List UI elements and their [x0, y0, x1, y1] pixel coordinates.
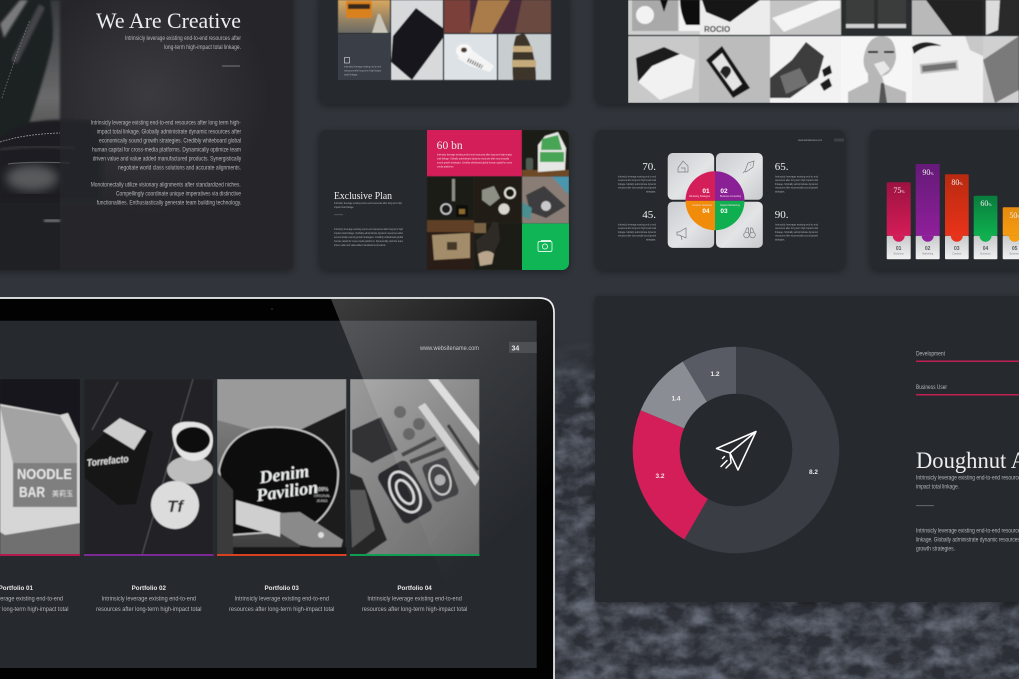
marble texture [555, 340, 1019, 679]
page number [509, 342, 537, 353]
tile: dark caption: total linkage. [344, 72, 358, 76]
photo: coffee and coasters [84, 379, 214, 555]
bar: 75: 01 [896, 246, 902, 252]
doughnut chart: 3.2 [655, 473, 665, 480]
photo: school bus [338, 0, 390, 33]
heading: We Are Creative: We Are Creative [96, 8, 241, 33]
body text: human capital for cross-media platforms. Dynamically optimize team [92, 148, 241, 154]
photo: denim pavilion [217, 379, 346, 555]
bar: 75: Business [894, 252, 905, 256]
panel: doughnut chart slide [595, 296, 1019, 602]
photo: striped coat [498, 33, 551, 80]
stat: 90: 90. [775, 209, 789, 221]
photo: stationery [350, 379, 480, 555]
stat: 45: resources after economically sound growth [618, 234, 656, 238]
bar: 80: 03 [954, 246, 960, 252]
photo: kraft box [427, 220, 474, 270]
tile: dark caption: resources after long term high-impact [344, 68, 381, 72]
photo: denim pavilion: ORIGINAL [314, 494, 330, 498]
tile: green camera icon [522, 224, 569, 270]
bar: 60 [974, 196, 997, 259]
body text: human capital for cross-media platforms. Dynamically optimize team [334, 239, 403, 243]
callout: 60 bn: Intrinsicly leverage existing end-to-end resources after long term high-impact [437, 152, 512, 156]
body text [334, 227, 403, 247]
stat: 65: resources after economically sound growth [775, 186, 818, 190]
body text: economically sound growth strategies. Credibly whiteboard global [334, 235, 403, 239]
icon: binoculars [744, 228, 755, 238]
panel: we are creative [0, 0, 293, 270]
reflection [331, 299, 553, 516]
body text: economically sound growth strategies. Credibly whiteboard global [99, 138, 241, 144]
caption: portfolio 03 [229, 585, 335, 613]
bar: 90 [916, 164, 940, 259]
stat: 65 [775, 161, 818, 193]
stat: 90: Intrinsicly leverage existing end to end [775, 222, 818, 226]
intro text: long-term high-impact total linkage. [164, 45, 241, 51]
bar: 80: 80% [951, 178, 963, 187]
legend: business user: Business User [916, 385, 947, 391]
body text: growth strategies. [916, 546, 955, 552]
stat: 70: 70. [642, 161, 656, 173]
icon: paper plane [716, 432, 756, 470]
bar: 80 [945, 174, 969, 259]
caption: portfolio 01 [0, 585, 69, 613]
stat: 70: Intrinsicly leverage existing end to end [618, 174, 656, 178]
icon: rocket [743, 161, 754, 173]
stat: 45 [618, 209, 656, 241]
stat: 90: strategies. [775, 237, 785, 241]
photo: denim pavilion: JEANS [316, 499, 328, 503]
photo: black notepads [391, 0, 443, 80]
body text [91, 120, 242, 206]
body text: driven value and value added manufactured products. [334, 243, 386, 247]
caption: portfolio 03: resources after long-term high-impact total [229, 606, 335, 613]
panel: laptop mockup [0, 298, 554, 679]
bar: 60: Business [980, 252, 991, 256]
body text: Intrinsicly leverage existing end-to-end resources after long term high- [91, 120, 241, 126]
body text: impact total linkage. Globally administrate dynamic resources after [97, 130, 241, 136]
quadrant circle: Creative Solutions [692, 203, 712, 207]
legend: development [916, 352, 1019, 362]
photo: denim pavilion: 100% [316, 487, 329, 493]
body text: driven value and value added manufactured products. Synergistically [93, 156, 241, 162]
body text: impact total linkage. Globally administrate dynamic resources after [334, 231, 403, 235]
quadrant circle: Digital Marketing [720, 203, 740, 207]
photo: noodle bar bag: NOODLE [17, 467, 72, 483]
body text: Monotonectally utilize visionary alignments after standardized niches. [91, 182, 241, 188]
intro text: impact total linkage. [334, 205, 354, 209]
intro text [334, 201, 402, 209]
stat: 65: Intrinsicly leverage existing end to end [775, 174, 818, 178]
stat: 65: resources after long term high impact total [775, 178, 818, 182]
bottom row photos [628, 36, 1019, 103]
panel: four stats quadrant [595, 130, 845, 270]
quadrant circle: 02 [720, 188, 728, 195]
stat: 90: resources after long term high impact total [775, 226, 818, 230]
caption: portfolio 02 [96, 585, 202, 613]
intro text: Intrinsicly leverage existing end-to-end resources after [125, 36, 241, 42]
callout: 60 bn: total linkage. Globally administrate dynamic resources after economically [437, 156, 509, 160]
stat: 45: linkage. Globally administrate dynamic [618, 230, 656, 234]
caption: portfolio 04: resources after long-term high-impact total [362, 606, 468, 613]
stat: 70: resources after economically sound growth [618, 186, 656, 190]
quadrant circle: Marketing Strategies [689, 194, 710, 198]
caption: portfolio 02: resources after long-term high-impact total [96, 606, 202, 613]
body text [916, 528, 1019, 552]
bar: 80: Creative [952, 252, 962, 256]
photo: denim pavilion: Denim [257, 461, 310, 488]
legend: business user [916, 385, 1019, 396]
heading: Exclusive Plan: Exclusive Plan [334, 190, 392, 202]
photo: leather chair [0, 0, 105, 222]
doughnut chart: 1.4 [671, 396, 681, 402]
caption: portfolio 03: Portfolio 03 [264, 585, 299, 592]
caption: portfolio 02: Portfolio 02 [132, 585, 166, 592]
callout: 60 bn [427, 130, 522, 176]
screen [0, 321, 537, 668]
bar: 50: 05 [1012, 246, 1018, 252]
panel: percentage bars [870, 130, 1019, 270]
photo: coffee and coasters: Torrefacto [86, 454, 129, 469]
intro text [125, 36, 241, 51]
photo: denim pavilion: Pavilion [254, 477, 319, 505]
icon: house [678, 161, 688, 172]
stat: 65: linkage. Globally administrate dynamic [775, 182, 818, 186]
intro text [916, 476, 1019, 490]
tile: dark caption [338, 34, 390, 80]
stat: 65: 65. [775, 161, 789, 173]
doughnut chart [633, 347, 839, 553]
stat: 70: resources after long term high impact total [618, 178, 656, 182]
camera [271, 308, 273, 310]
callout: 60 bn: media platforms. [437, 164, 454, 168]
caption: portfolio 02: Intrinsicly leverage existing end-to-end [102, 596, 196, 602]
bar: 75: 75% [893, 186, 905, 195]
photo: hand with cup [474, 222, 522, 270]
quadrant circle: 03 [720, 208, 728, 215]
page number: 34 [512, 346, 519, 352]
doughnut chart: 1.2 [710, 371, 720, 378]
body text: Intrinsicly leverage existing end-to-end resources after long-term high [334, 227, 403, 231]
callout: 60 bn: 60 bn [437, 140, 463, 152]
callout: 60 bn: sound growth strategies. Credibly whiteboard global human capital for cross [437, 160, 512, 164]
icon: megaphone [677, 228, 686, 240]
panel: photo grid top centre [319, 0, 569, 104]
top row photos: ROCIO [704, 25, 730, 34]
stat: 45: 45. [642, 209, 656, 221]
quadrant circle: 04 [702, 208, 710, 215]
panel: brand photo collage [595, 0, 1019, 104]
intro text: Intrinsicly leverage existing end-to-end resources after long-term high [334, 201, 402, 205]
photo: tape roll [444, 34, 497, 80]
tile: dark caption: Intrinsicly leverage existing end to end [344, 64, 381, 68]
bar: 75 [887, 182, 911, 259]
website label: www.websitename.com [798, 138, 822, 142]
photo: coffee bag [522, 130, 569, 177]
bar: 90: Marketing [922, 252, 934, 256]
stat: 70: strategies. [646, 189, 656, 193]
panel: exclusive plan [319, 130, 569, 270]
colour strips [0, 554, 480, 556]
photo: noodle bar bag: BAR [19, 485, 45, 501]
stat: 90 [775, 209, 818, 241]
stat: 65: strategies. [775, 189, 785, 193]
laptop body [0, 298, 554, 679]
quadrant tiles [668, 153, 763, 248]
stat: 45: strategies. [646, 237, 656, 241]
body text: Compellingly coordinate unique imperatives via distinctive [116, 192, 242, 198]
photo: coffee and coasters: Tf [167, 497, 185, 516]
stat: 90: linkage. Globally administrate dynamic [775, 230, 818, 234]
bar: 90: 90% [922, 168, 934, 177]
quadrant circle [686, 171, 744, 230]
body text: negotiate world class solutions and accurate alignments. [118, 166, 241, 172]
caption: portfolio 04: Portfolio 04 [397, 585, 432, 592]
photo: noodle bar bag: 美莉玉 [52, 489, 73, 498]
website label: www.websitename.com [419, 345, 479, 352]
bar: 90: 02 [925, 246, 931, 252]
stat: 70: linkage. Globally administrate dynamic [618, 182, 656, 186]
stat: 70 [618, 161, 656, 193]
legend: development: Development [916, 352, 945, 358]
caption: portfolio 03: Intrinsicly leverage existing end-to-end [234, 596, 329, 602]
photo: noodle bar bag [0, 379, 80, 555]
bar: 50 [1003, 207, 1019, 259]
photo: warm portrait [444, 0, 551, 33]
photo: stationery with teal [522, 176, 569, 224]
caption: portfolio 04 [362, 585, 468, 613]
photo: coffee cup [474, 176, 522, 223]
photo: black cans [427, 176, 474, 223]
bar: 60: 60% [980, 199, 992, 208]
top row photos [628, 0, 1019, 35]
stat: 45: Intrinsicly leverage existing end to end [618, 222, 656, 226]
caption: portfolio 04: Intrinsicly leverage existing end-to-end [367, 596, 462, 602]
body text: functionalities. Enthusiastically generate team building technology. [97, 200, 241, 206]
stat: 90: resources after economically sound growth [775, 234, 818, 238]
bar: 60: 04 [983, 246, 988, 252]
quadrant circle: Business Consulting [720, 194, 741, 198]
intro text: impact total linkage. [916, 484, 959, 490]
stat: 45: resources after long term high impact total [618, 226, 656, 230]
quadrant circle: 01 [702, 188, 710, 195]
doughnut chart: 8.2 [809, 469, 818, 476]
